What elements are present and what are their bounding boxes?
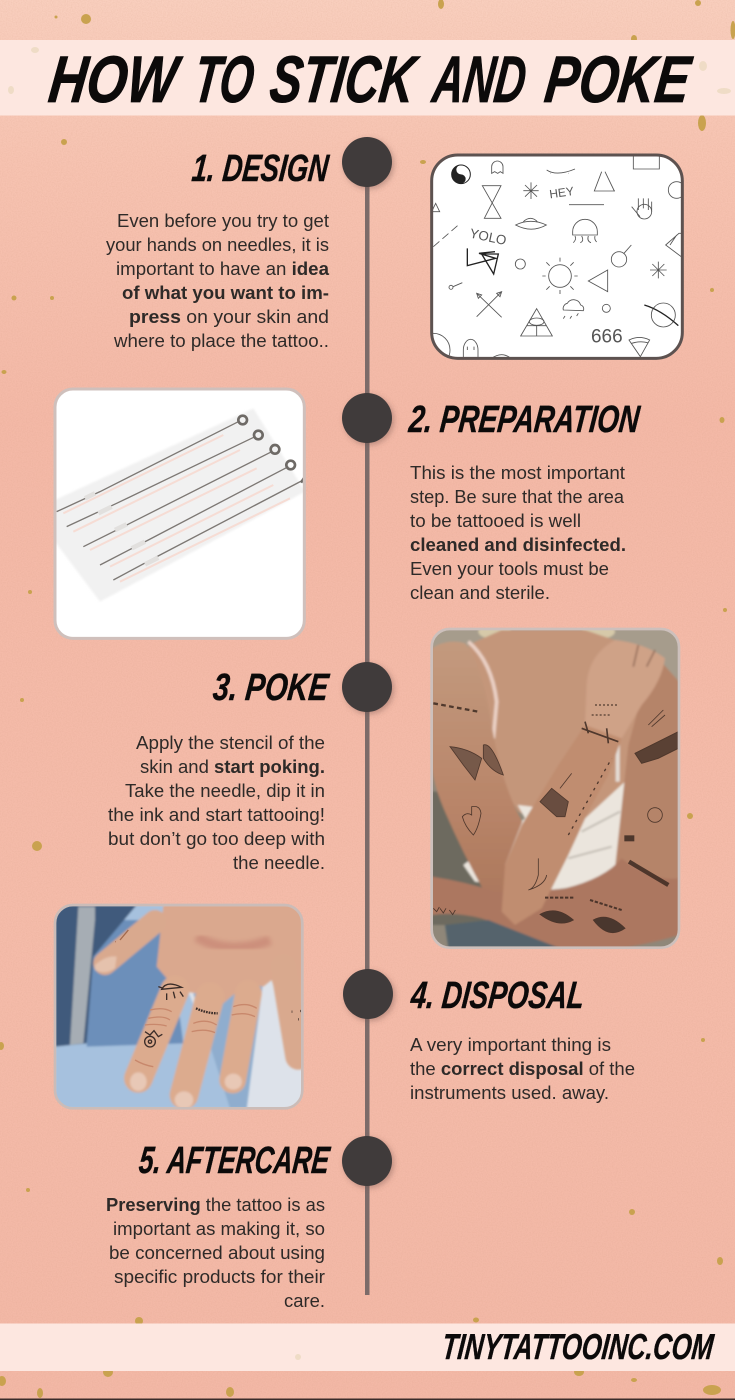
step 4: disposal [343, 969, 635, 1103]
torso [468, 630, 636, 818]
doodles: HEY [548, 184, 575, 201]
tattoos [433, 703, 678, 933]
bottom edge line [0, 1398, 735, 1400]
photo shapes [432, 624, 679, 948]
left arm [433, 641, 524, 892]
white top [463, 782, 629, 890]
step 5: aftercare [106, 1136, 392, 1311]
title: TO [190, 43, 258, 117]
text: aftercare: specific products for their [114, 1267, 325, 1287]
text: poke: the needle. [233, 853, 325, 873]
text: aftercare: Preserving the tattoo is as [106, 1195, 325, 1215]
title band [0, 40, 735, 116]
raised forearm [502, 725, 622, 925]
text: preparation: This is the most important [410, 463, 625, 483]
text: preparation [410, 463, 626, 603]
knuckle creases [135, 1005, 257, 1067]
timeline dot 1 [342, 137, 392, 187]
doodles [433, 156, 681, 357]
text: design: press on your skin and [129, 307, 329, 327]
title: AND [428, 43, 530, 117]
lower forearm [432, 858, 679, 948]
text: poke: Apply the stencil of the [136, 733, 325, 753]
needles [57, 416, 303, 580]
timeline dot 4 [343, 969, 393, 1019]
heading: poke: 3. POKE [211, 667, 332, 709]
image: tattooed arms photo [432, 624, 679, 948]
step 2: preparation [342, 393, 643, 603]
title: STICK [266, 43, 422, 117]
title [45, 43, 696, 117]
text: preparation: Even your tools must be [410, 559, 609, 579]
doodles: YOLO [468, 226, 508, 248]
card border [55, 389, 304, 638]
heading: disposal: 4. DISPOSAL [408, 975, 586, 1017]
text: preparation: step. Be sure that the area [410, 487, 625, 507]
timeline dot 2 [342, 393, 392, 443]
text: design: important to have an idea [116, 259, 330, 279]
text: poke: but don’t go too deep with [108, 829, 325, 849]
text: disposal: the correct disposal of the [410, 1059, 635, 1079]
footer band [0, 1324, 735, 1371]
step 1: design [106, 137, 392, 351]
timeline dot 5 [342, 1136, 392, 1186]
text: design: of what you want to im- [122, 283, 329, 303]
title: POKE [541, 43, 696, 117]
text: preparation: to be tattooed is well [410, 511, 581, 531]
title: HOW [45, 43, 186, 117]
text: disposal: instruments used. away. [410, 1083, 609, 1103]
text: aftercare: important as making it, so [113, 1219, 325, 1239]
card border [55, 905, 302, 1108]
text: preparation: cleaned and disinfected. [410, 535, 626, 555]
step 3: poke [108, 662, 392, 873]
photo shapes [55, 905, 302, 1109]
image: tattoo needles [55, 389, 305, 638]
text: disposal [410, 1035, 635, 1103]
text: preparation: clean and sterile. [410, 583, 550, 603]
jeans [445, 920, 558, 948]
hand [155, 906, 301, 1004]
text: design: where to place the tattoo.. [113, 331, 329, 351]
doodles: 666 [591, 327, 623, 348]
card border [432, 155, 682, 358]
image: doodle tattoo designs [417, 155, 686, 367]
text: poke: the ink and start tattooing! [108, 805, 325, 825]
text: poke: skin and start poking. [140, 757, 325, 777]
text: poke: Take the needle, dip it in [125, 781, 325, 801]
text: aftercare [106, 1195, 325, 1311]
text: design [106, 211, 330, 351]
text: aftercare: care. [284, 1291, 325, 1311]
text: poke [108, 733, 325, 873]
heading: design: 1. DESIGN [190, 148, 332, 190]
card border [432, 629, 679, 948]
text: design: Even before you try to get [117, 211, 329, 231]
text: disposal: A very important thing is [410, 1035, 611, 1055]
timeline line [365, 162, 370, 1295]
heading: aftercare: 5. AFTERCARE [137, 1140, 333, 1182]
text: design: your hands on needles, it is [106, 235, 329, 255]
heading: preparation: 2. PREPARATION [406, 399, 643, 441]
hand [585, 640, 665, 738]
tattoos [115, 930, 301, 1047]
text: aftercare: be concerned about using [109, 1243, 325, 1263]
fingers [105, 922, 298, 1095]
needle packaging [55, 408, 305, 602]
image: finger tattoos photo [55, 905, 302, 1109]
timeline dot 3 [342, 662, 392, 712]
right arm [614, 666, 678, 880]
